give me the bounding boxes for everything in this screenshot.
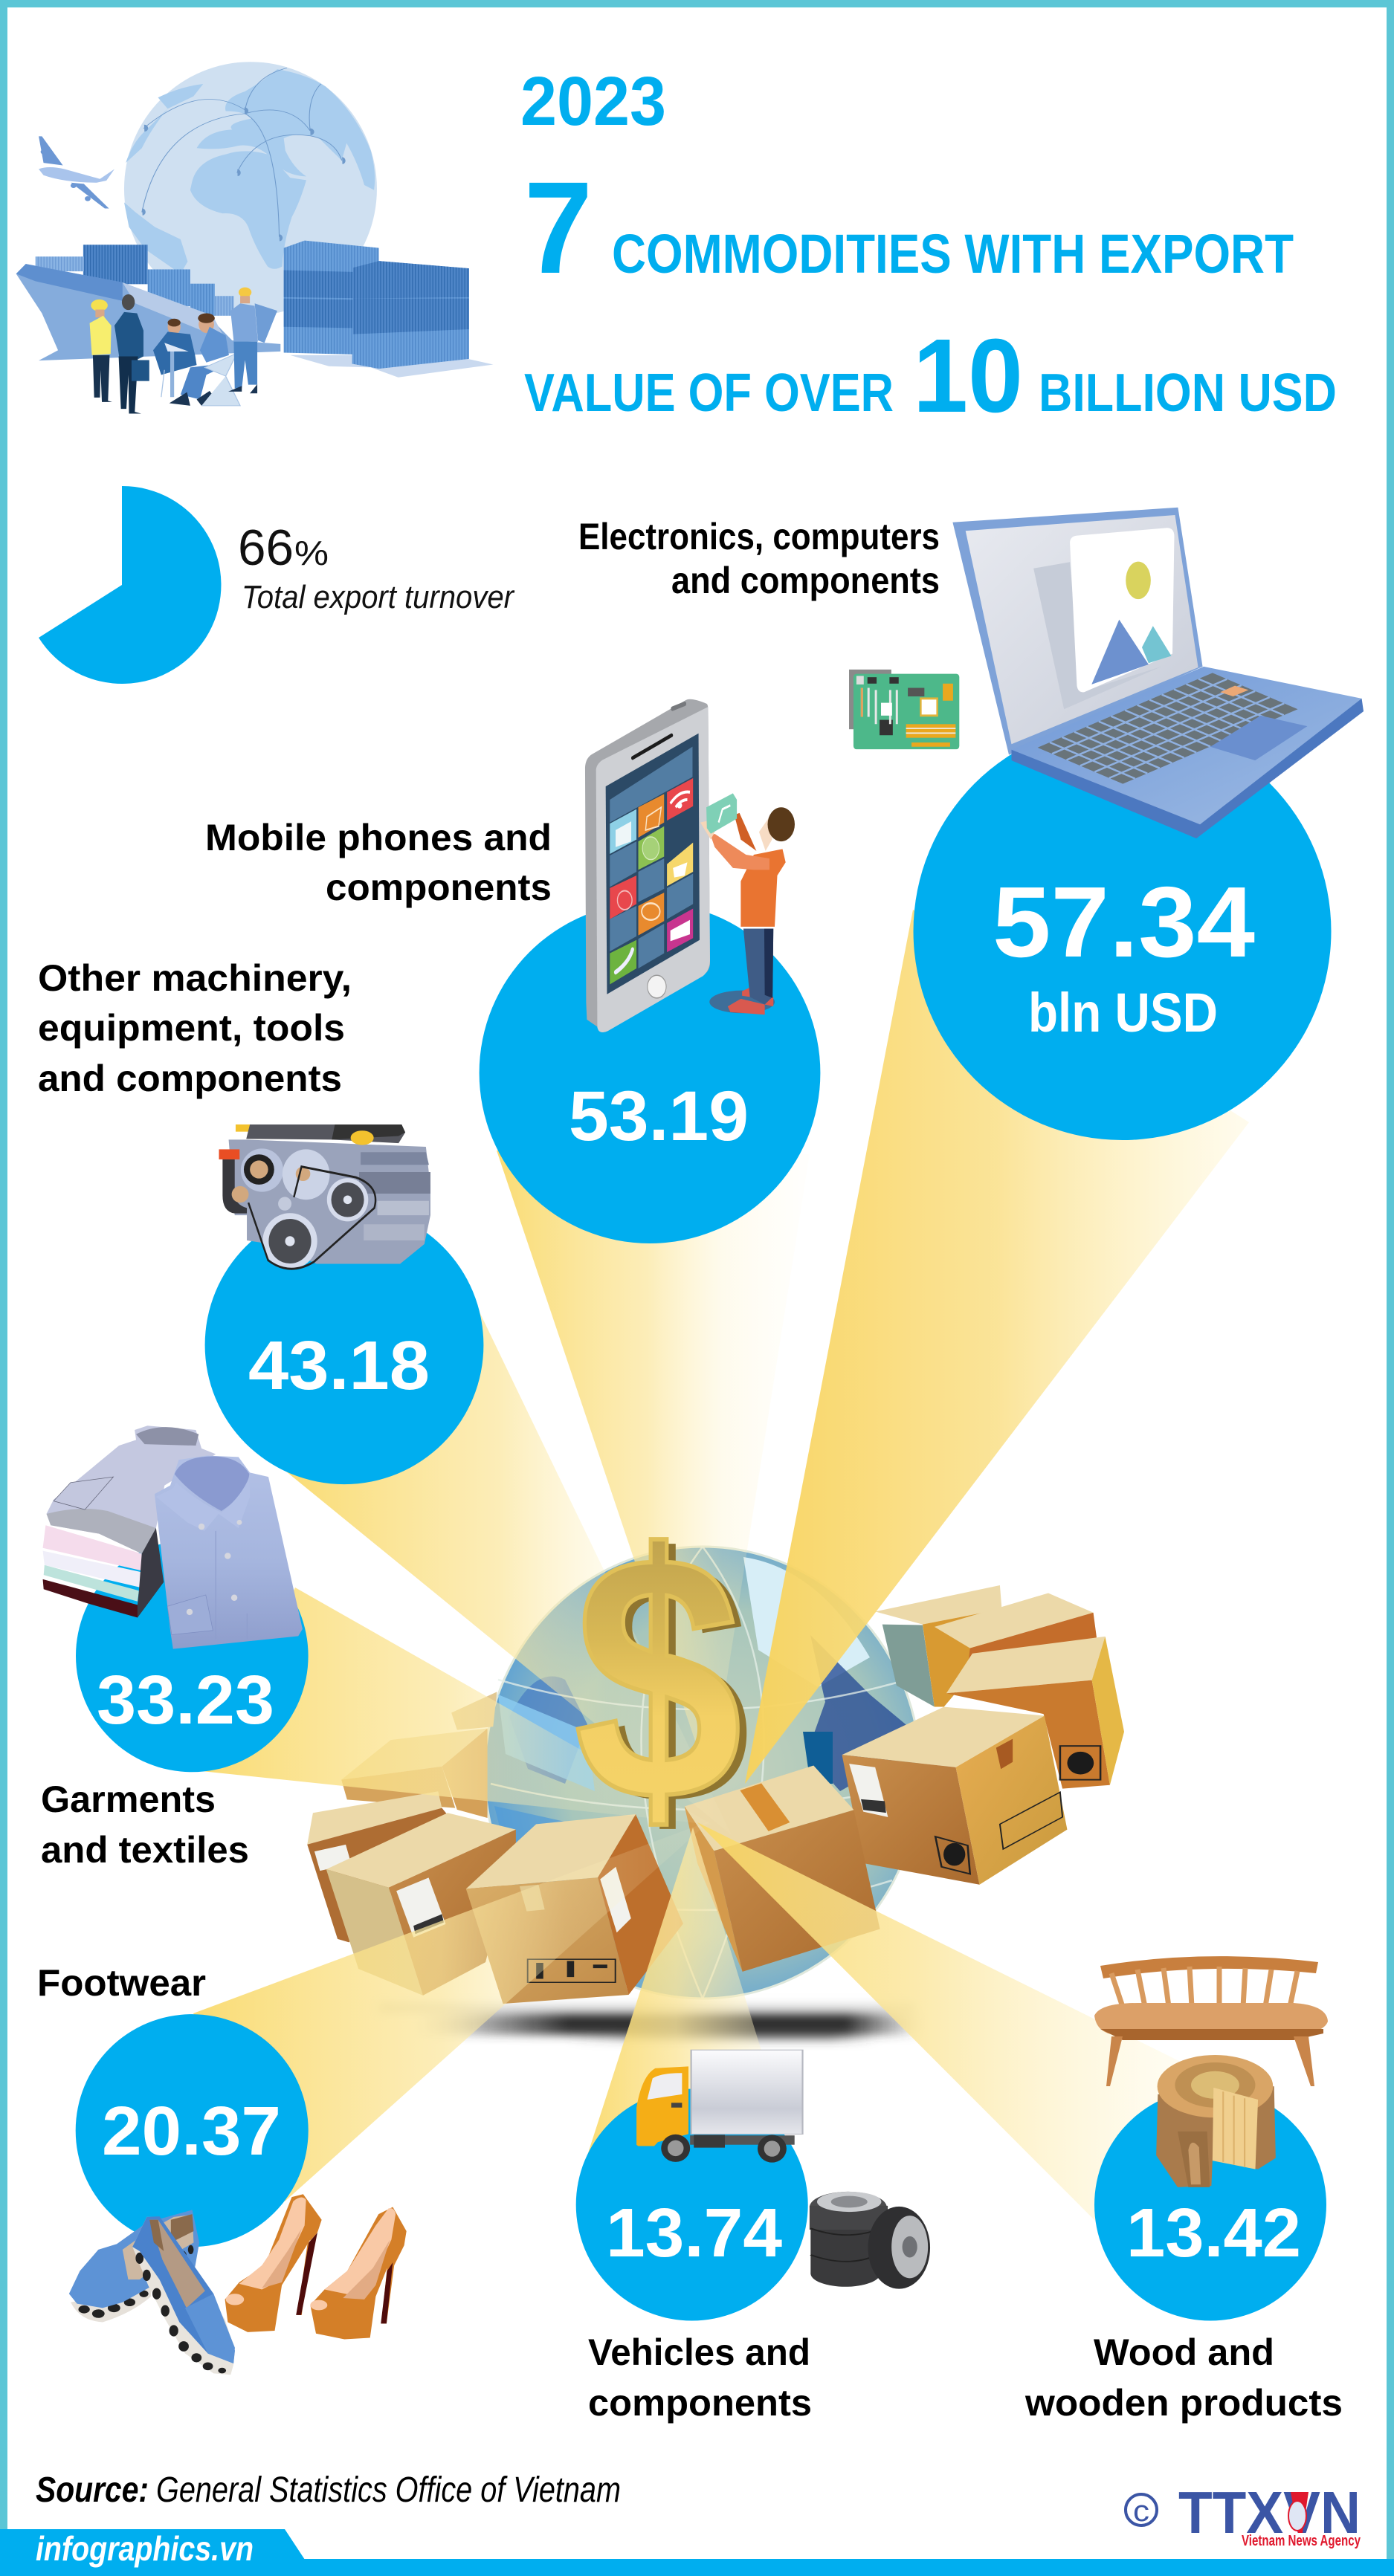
- title: [520, 62, 1337, 434]
- icon: gold dollar sign: $: [583, 1487, 751, 1877]
- icon: airplane: [39, 136, 114, 209]
- label: and components: [671, 560, 940, 601]
- value circle: [480, 902, 820, 1243]
- value circle: [205, 1206, 483, 1484]
- source note: Source:: [36, 2470, 149, 2510]
- label: Other machinery,: [38, 957, 352, 999]
- commodity: footwear: [37, 1962, 407, 2375]
- label: Wood and: [1094, 2331, 1274, 2373]
- icon: engine: [219, 1124, 430, 1269]
- ray: garments: [201, 1588, 712, 1825]
- label: components: [326, 867, 552, 908]
- label: and components: [38, 1058, 342, 1099]
- label: Vehicles and: [588, 2331, 810, 2373]
- source note: [36, 2470, 621, 2510]
- value circle: 53.19: [569, 1077, 749, 1156]
- logo: TTXVN Vietnam News Agency: TTXVN: [1178, 2479, 1361, 2546]
- value circle: 20.37: [102, 2092, 281, 2169]
- title line 1: 7: [524, 155, 593, 301]
- commodity: mobile phones and components: [205, 699, 820, 1243]
- value circle: [76, 2014, 309, 2247]
- label: [588, 2331, 812, 2424]
- value circle: 57.34: [993, 866, 1255, 978]
- value circle: 13.74: [606, 2194, 782, 2271]
- central illustration: globe with cardboard boxes: [307, 1547, 1124, 2004]
- label: Electronics, computers: [578, 516, 940, 557]
- icon: blue loafers and orange high heels: [69, 2194, 407, 2375]
- title line 1: [524, 155, 1294, 301]
- icon: wooden bench: [1094, 1956, 1328, 2086]
- ray: footwear: [193, 1821, 710, 2201]
- stat: 66%: 66: [238, 520, 294, 576]
- logo: TTXVN Vietnam News Agency: c: [1133, 2495, 1149, 2528]
- value circle: [576, 2088, 808, 2320]
- label: Mobile phones and: [205, 817, 552, 858]
- value circle: 13.42: [1126, 2194, 1301, 2271]
- icon: world globe: [124, 62, 377, 316]
- icon: gold dollar sign: $: [574, 1483, 742, 1873]
- title line 2: BILLION USD: [1039, 363, 1337, 423]
- commodity: electronics, computers and components: [578, 508, 1364, 1140]
- pie chart: 66 percent: [39, 486, 515, 684]
- boxes, left group: [307, 1692, 516, 1996]
- label: [205, 817, 552, 908]
- label: Garments: [41, 1779, 216, 1820]
- commodity: garments and textiles: [41, 1425, 309, 1871]
- ray: wood: [697, 1822, 1190, 2222]
- globe shadow: [379, 2004, 922, 2041]
- ray: mobile phones: [497, 1151, 810, 1785]
- value circle: bln USD: [1028, 982, 1218, 1043]
- icon: earth globe: [485, 1547, 920, 1999]
- value circle: [913, 722, 1331, 1140]
- icon: container stacks: [284, 241, 494, 378]
- boxes, front: [466, 1707, 1067, 2004]
- footer site name: infographics.vn: [36, 2529, 254, 2568]
- title line 2: 10: [913, 317, 1023, 434]
- label: [38, 957, 352, 1099]
- icon: delivery truck: [636, 2050, 803, 2163]
- ray: vehicles: [587, 1828, 784, 2155]
- icon: laptop: [952, 508, 1364, 838]
- title year: 2023: [520, 62, 666, 140]
- stat: 66%: [238, 520, 329, 576]
- footer bar: [0, 2529, 1394, 2576]
- label: [1024, 2331, 1343, 2424]
- icon: smartphone: [585, 699, 710, 1032]
- value circle: 43.18: [248, 1327, 430, 1404]
- stat: 66%: %: [294, 534, 329, 572]
- label: [41, 1779, 249, 1871]
- boxes, back right: [875, 1585, 1124, 1789]
- label: components: [588, 2382, 812, 2424]
- value circle: [1094, 2088, 1326, 2320]
- value circle: 33.23: [97, 1661, 274, 1738]
- title line 2: [524, 317, 1337, 434]
- title line 1: COMMODITIES WITH EXPORT: [612, 223, 1294, 285]
- logo: TTXVN Vietnam News Agency: [1126, 2479, 1361, 2549]
- ray: machinery: [286, 1304, 732, 1835]
- label: and textiles: [41, 1829, 249, 1871]
- commodity: wood and wooden products: [1024, 1956, 1343, 2424]
- icon: circuit board: [849, 670, 959, 749]
- caption: total export turnover: Total export turnover: [242, 579, 515, 615]
- icon: folded shirts: [43, 1425, 303, 1649]
- label: equipment, tools: [38, 1007, 345, 1049]
- label: wooden products: [1024, 2382, 1343, 2424]
- people: workers and businessmen: [90, 288, 258, 413]
- icon: container ship: [16, 245, 280, 360]
- label: Footwear: [37, 1962, 206, 2004]
- icon: man using the phone: [700, 793, 795, 1014]
- light rays from globe to commodities: [193, 910, 1249, 2222]
- source note: General Statistics Office of Vietnam: [156, 2470, 621, 2510]
- value circle: [76, 1540, 309, 1772]
- icon: tree stump: [1156, 2055, 1276, 2187]
- commodity: vehicles and components: [576, 2050, 930, 2424]
- ray: electronics: [745, 910, 1249, 1784]
- title line 2: VALUE OF OVER: [524, 363, 894, 423]
- illustration: shipping scene with globe, plane, ship, containers and people: [16, 62, 494, 413]
- commodity: other machinery, equipment, tools and components: [38, 957, 483, 1484]
- label: [578, 516, 940, 601]
- icon: stacked tires: [810, 2192, 930, 2289]
